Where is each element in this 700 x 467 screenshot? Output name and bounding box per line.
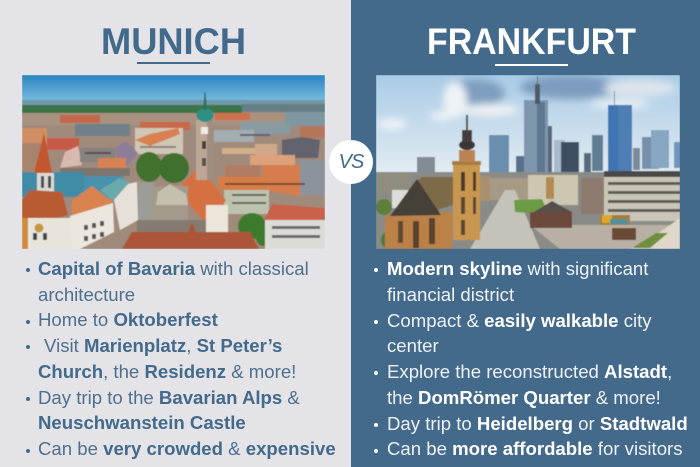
bullet 3: the DomRömer Quarter & more! — [387, 387, 661, 408]
bullet 5: Can be more affordable for visitors — [387, 438, 683, 459]
bottom right building — [264, 204, 325, 228]
rooftop detail — [232, 194, 266, 196]
bullet 3 — [374, 361, 672, 408]
bullet 3: Explore the reconstructed Alstadt, — [387, 361, 672, 382]
street and plaza — [470, 190, 540, 249]
clouds — [378, 75, 676, 129]
bullet 4 — [26, 386, 300, 433]
heading underline: Munich — [137, 62, 210, 64]
bullet 3: Church, the Residenz & more! — [38, 361, 296, 382]
church roof — [176, 167, 226, 226]
bullet 4: Day trip to the Bavarian Alps & — [38, 386, 300, 408]
bullet 1: architecture — [38, 284, 135, 305]
bullet 2: center — [387, 335, 439, 356]
white gabled building — [72, 186, 113, 218]
mid-ground — [376, 172, 680, 249]
bullet 4: Neuschwanstein Castle — [38, 412, 246, 433]
panel: Munich — [0, 0, 351, 467]
bullet 1 — [374, 258, 648, 305]
heading underline: Frankfurt — [495, 64, 568, 66]
old town hall — [34, 133, 52, 173]
bullet 3 — [26, 335, 296, 382]
bullet 4: Day trip to Heidelberg or Stadtwald — [387, 412, 688, 434]
bullet 1 — [26, 258, 309, 305]
heading: Munich: MUNICH — [101, 20, 246, 62]
badge: VS: VS — [339, 151, 363, 173]
bullet 1: Modern skyline with significant — [387, 258, 648, 279]
bullet list: Munich — [26, 258, 336, 459]
trees left — [376, 199, 392, 215]
photo: Frankfurt skyline — [376, 75, 680, 249]
skyscrapers — [417, 157, 435, 177]
bullet 2 — [374, 310, 652, 356]
bullet 2: Home to Oktoberfest — [38, 309, 218, 330]
trees — [136, 152, 162, 182]
bullet list: Frankfurt — [374, 258, 688, 459]
bottom red roof — [122, 222, 259, 249]
panel: Frankfurt — [351, 0, 700, 467]
bullet 5: Can be very crowded & expensive — [38, 438, 336, 459]
bullet 1: financial district — [387, 284, 514, 305]
bullet 3: Visit Marienplatz, St Peter’s — [44, 335, 282, 356]
church — [415, 177, 453, 212]
tower of St Peter's — [196, 120, 213, 180]
bullet 2: Compact & easily walkable city — [387, 310, 652, 331]
badge: VS — [329, 140, 373, 184]
bullet 1: Capital of Bavaria with classical — [38, 258, 309, 279]
photo: Munich aerial cityscape — [22, 75, 325, 249]
